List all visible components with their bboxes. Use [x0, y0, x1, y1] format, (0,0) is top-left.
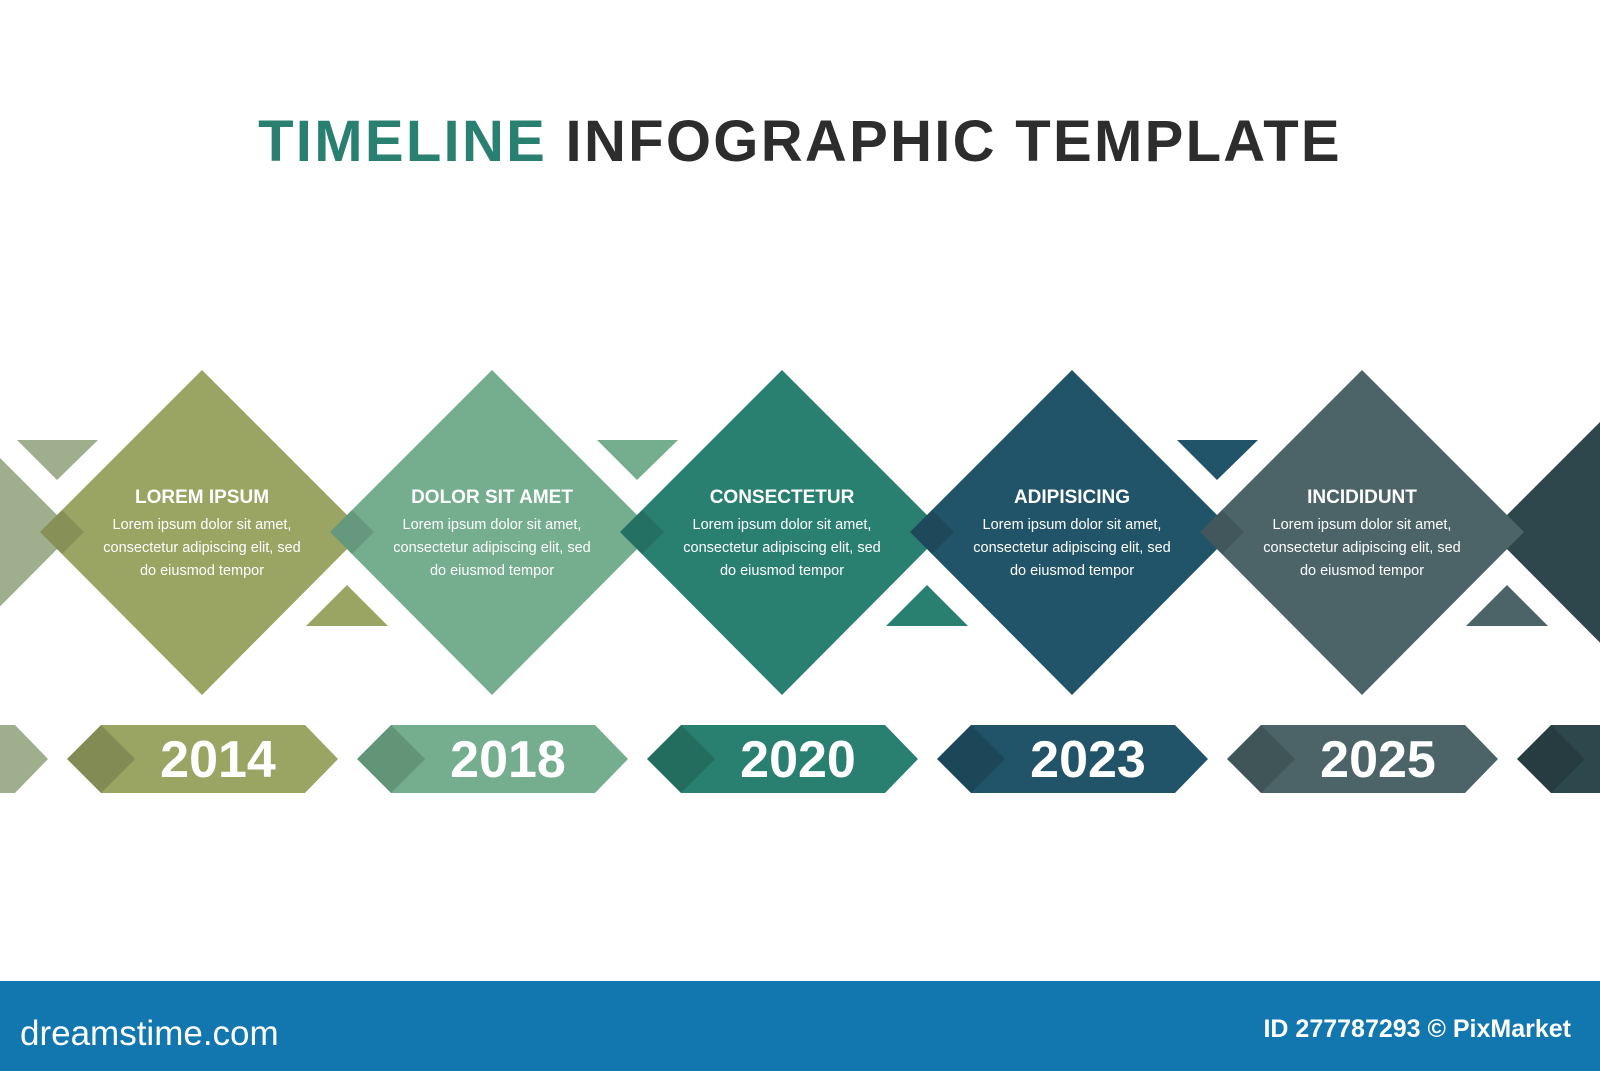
banner: 2020: [647, 725, 918, 793]
panel: dolor sit amet: consectetur adipiscing elit, sed: [393, 540, 591, 556]
banner: 2023: 2023: [1030, 731, 1146, 789]
partial diamond left: [0, 370, 74, 695]
triangle bottom 2: [886, 585, 968, 626]
panel: dolor sit amet: [330, 370, 654, 695]
banner: 2014: 2014: [160, 731, 276, 789]
banner: 2025: [1227, 725, 1498, 793]
banner: 2014: [67, 725, 338, 793]
panel: adipisicing: ADIPISICING: [1014, 487, 1130, 508]
title: TIMELINE INFOGRAPHIC TEMPLATE: [258, 109, 1342, 174]
triangle bottom 1: [306, 585, 388, 626]
panel: consectetur: [620, 370, 944, 695]
triangle top 1: [17, 440, 98, 480]
banner: 2018: 2018: [450, 731, 566, 789]
panel: incididunt: INCIDIDUNT: [1307, 487, 1417, 508]
footer bar: dreamstime.com: [20, 1014, 279, 1053]
banner partial left: [0, 725, 48, 793]
banner: 2025: 2025: [1320, 731, 1436, 789]
panel: dolor sit amet: Lorem ipsum dolor sit amet,: [403, 517, 581, 533]
panel: dolor sit amet: do eiusmod tempor: [430, 563, 554, 579]
banner: 2023: [937, 725, 1208, 793]
panel: adipisicing: Lorem ipsum dolor sit amet,: [983, 517, 1161, 533]
panel: lorem ipsum: do eiusmod tempor: [140, 563, 264, 579]
panel: lorem ipsum: LOREM IPSUM: [135, 487, 269, 508]
panel: consectetur: Lorem ipsum dolor sit amet,: [693, 517, 871, 533]
banner partial right: [1517, 725, 1600, 793]
triangle bottom 3: [1466, 585, 1548, 626]
panel: consectetur: CONSECTETUR: [710, 487, 855, 508]
panel: adipisicing: [910, 370, 1234, 695]
panel: incididunt: consectetur adipiscing elit, sed: [1263, 540, 1461, 556]
triangle top 2: [597, 440, 678, 480]
panel: dolor sit amet: DOLOR SIT AMET: [411, 487, 573, 508]
panel: incididunt: Lorem ipsum dolor sit amet,: [1273, 517, 1451, 533]
triangle top 3: [1177, 440, 1258, 480]
panel: consectetur: consectetur adipiscing elit, sed: [683, 540, 881, 556]
footer bar: [0, 981, 1600, 1071]
panel: lorem ipsum: consectetur adipiscing elit, sed: [103, 540, 301, 556]
panel: lorem ipsum: [40, 370, 364, 695]
footer bar: ID 277787293 © PixMarket: [1263, 1015, 1572, 1043]
banner: 2020: 2020: [740, 731, 856, 789]
banner: 2018: [357, 725, 628, 793]
partial diamond right: [1490, 370, 1600, 695]
panel: incididunt: [1200, 370, 1524, 695]
panel: incididunt: do eiusmod tempor: [1300, 563, 1424, 579]
panel: consectetur: do eiusmod tempor: [720, 563, 844, 579]
panel: adipisicing: consectetur adipiscing elit, sed: [973, 540, 1171, 556]
panel: adipisicing: do eiusmod tempor: [1010, 563, 1134, 579]
panel: lorem ipsum: Lorem ipsum dolor sit amet,: [113, 517, 291, 533]
